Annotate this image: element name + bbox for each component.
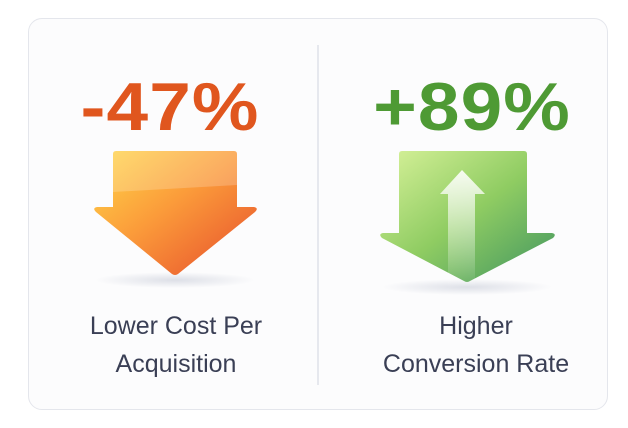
icon: orange down arrow	[94, 151, 257, 275]
stat: +89%: +89%	[373, 69, 571, 145]
label: lower cost per acquisition: Lower Cost Per	[90, 312, 262, 340]
label: lower cost per acquisition	[90, 312, 262, 378]
label: higher conversion rate	[383, 312, 569, 378]
icon: green arrow with up arrow	[380, 151, 555, 290]
divider	[317, 45, 319, 385]
label: lower cost per acquisition: Acquisition	[116, 350, 236, 378]
label: higher conversion rate: Higher	[439, 312, 513, 340]
stat: -47%: -47%	[80, 69, 260, 145]
label: higher conversion rate: Conversion Rate	[383, 350, 569, 378]
